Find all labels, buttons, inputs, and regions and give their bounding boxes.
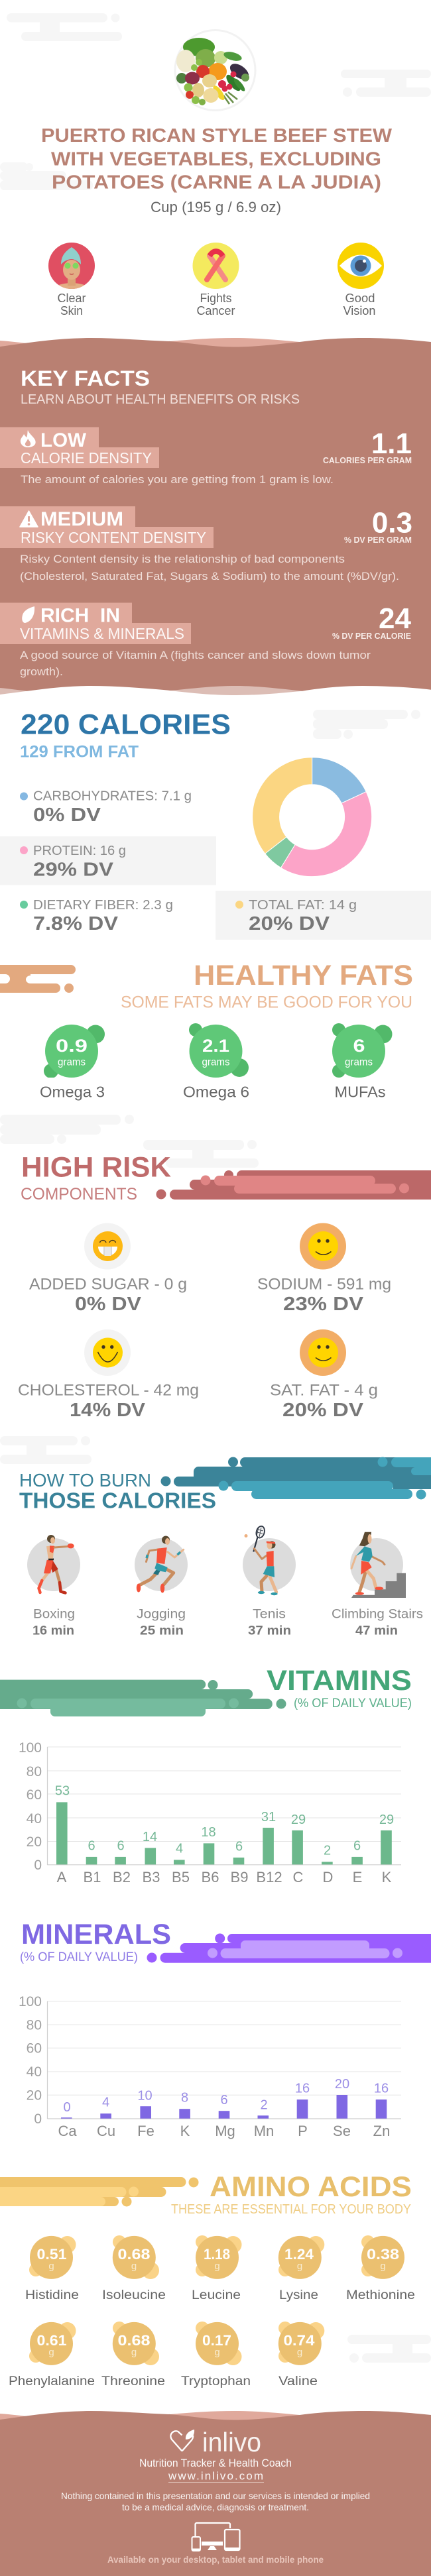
heading: how to burn those calories: THOSE CALORIES bbox=[19, 1488, 216, 1512]
subheading: vitamins: (% OF DAILY VALUE) bbox=[294, 1697, 412, 1710]
fact: medium risky content density: 0.3 bbox=[372, 506, 412, 539]
text: disclaimer: to be a medical advice, diagnosis or treatment. bbox=[122, 2502, 309, 2512]
decoration: amino acids bars bbox=[0, 2177, 199, 2207]
fat badge: omega 3: 0.9 bbox=[56, 1036, 88, 1056]
risk item: cholesterol: 14% DV bbox=[70, 1400, 146, 1421]
fact: rich in vitamins and minerals: RICH IN bbox=[40, 604, 120, 627]
bar chart: vitamins: B5 bbox=[172, 1869, 190, 1885]
bar chart: vitamins: 6 bbox=[117, 1839, 125, 1854]
background cloud: calories bbox=[313, 710, 420, 739]
exercise: climbing stairs bbox=[350, 1532, 406, 1598]
fat badge: omega 3: grams bbox=[58, 1056, 86, 1068]
text: disclaimer bbox=[61, 2491, 370, 2512]
bar chart: minerals: Fe bbox=[137, 2123, 154, 2139]
bar chart: minerals: K bbox=[180, 2123, 190, 2139]
title: PUERTO RICAN STYLE BEEF STEW bbox=[41, 125, 393, 146]
bar chart: vitamins: D bbox=[323, 1869, 333, 1885]
amino acid: threonine bbox=[101, 2322, 165, 2388]
amino acid: valine: Valine bbox=[278, 2375, 318, 2388]
background cloud: high risk left bbox=[0, 1115, 134, 1144]
bar chart: vitamins: 2 bbox=[324, 1844, 331, 1858]
text: tagline: Nutrition Tracker & Health Coach bbox=[139, 2457, 292, 2469]
bar chart: minerals: 4 bbox=[102, 2095, 109, 2109]
title bbox=[41, 125, 393, 194]
risk item: cholesterol bbox=[18, 1329, 199, 1421]
amino acid: methionine bbox=[346, 2235, 415, 2302]
exercise: tennis bbox=[243, 1525, 296, 1595]
fact: low calorie density: CALORIES PER GRAM bbox=[323, 455, 412, 465]
bar chart: vitamins: 80 bbox=[27, 1764, 42, 1779]
label: boxing: Boxing bbox=[33, 1608, 75, 1621]
fact: low calorie density bbox=[0, 427, 412, 486]
macro: protein: PROTEIN: 16 g bbox=[33, 844, 126, 858]
macro: total fat bbox=[216, 891, 431, 940]
text: website: www.inlivo.com bbox=[168, 2469, 263, 2483]
amino acid: leucine: 1.18 bbox=[204, 2246, 230, 2263]
serving size: Cup (195 g / 6.9 oz) bbox=[151, 199, 281, 215]
label: clear skin: Skin bbox=[60, 304, 83, 317]
amino acid: isoleucine bbox=[102, 2235, 166, 2302]
bar chart: minerals: 16 bbox=[295, 2082, 310, 2096]
amino acid: threonine: Threonine bbox=[101, 2375, 165, 2388]
bar chart: vitamins: E bbox=[353, 1869, 362, 1885]
bar chart: vitamins: C bbox=[293, 1869, 304, 1885]
fact: low calorie density: 1.1 bbox=[371, 427, 412, 460]
heading: how to burn those calories: HOW TO BURN bbox=[19, 1470, 151, 1490]
label: jogging: Jogging bbox=[137, 1608, 186, 1621]
fat badge: omega 3 bbox=[40, 1025, 105, 1100]
fact: rich in vitamins and minerals: 24 bbox=[379, 602, 412, 635]
amino acid: threonine: g bbox=[131, 2347, 137, 2358]
label: fights cancer: Cancer bbox=[196, 304, 235, 317]
risk item: saturated fat: 20% DV bbox=[282, 1400, 364, 1421]
amino acid: phenylalanine bbox=[9, 2322, 95, 2388]
title: WITH VEGETABLES, EXCLUDING bbox=[51, 148, 381, 170]
fact: low calorie density: CALORIE DENSITY bbox=[21, 449, 152, 467]
amino acid: isoleucine: g bbox=[131, 2261, 137, 2272]
subheading: from fat: 129 FROM FAT bbox=[20, 742, 139, 761]
decoration: minerals bars bbox=[147, 1934, 431, 1963]
amino acid: valine bbox=[278, 2322, 324, 2388]
risk item: added sugar: 0% DV bbox=[75, 1294, 142, 1315]
bar chart: minerals: Zn bbox=[373, 2123, 390, 2139]
decoration: high risk bars bbox=[156, 1170, 431, 1200]
bar chart: vitamins: 18 bbox=[201, 1825, 216, 1840]
bar chart: vitamins: 0 bbox=[34, 1858, 42, 1873]
decoration: healthy fats bars bbox=[0, 965, 76, 993]
heading: calories: 220 CALORIES bbox=[21, 709, 231, 741]
fact: medium risky content density: RISKY CONTENT DENSITY bbox=[21, 529, 206, 546]
bar chart: vitamins: 53 bbox=[55, 1784, 70, 1799]
bar chart: vitamins: B12 bbox=[256, 1869, 282, 1885]
bar chart: minerals: 100 bbox=[19, 1994, 42, 2009]
bar chart: minerals: Cu bbox=[97, 2123, 115, 2139]
amino acid: tryptophan: 0.17 bbox=[202, 2332, 231, 2349]
amino acid: leucine: g bbox=[214, 2261, 220, 2272]
decoration: vitamins bars bbox=[0, 1680, 286, 1716]
icon: fights cancer bbox=[192, 243, 239, 289]
risk item: cholesterol: CHOLESTEROL - 42 mg bbox=[18, 1381, 199, 1400]
exercise: boxing bbox=[27, 1535, 80, 1593]
bar chart: vitamins: 20 bbox=[27, 1834, 42, 1850]
amino acid: valine: g bbox=[297, 2347, 302, 2358]
amino acid: threonine: 0.68 bbox=[118, 2332, 150, 2349]
bar chart: vitamins: 4 bbox=[176, 1842, 183, 1856]
macro: protein: 29% DV bbox=[33, 859, 114, 880]
amino acid: histidine: Histidine bbox=[25, 2288, 79, 2302]
macro: carbohydrates: 0% DV bbox=[33, 805, 101, 826]
icon: good vision bbox=[338, 243, 384, 289]
risk item: added sugar bbox=[29, 1223, 187, 1315]
macro: total fat: TOTAL FAT: 14 g bbox=[249, 898, 357, 913]
subheading: healthy fats: SOME FATS MAY BE GOOD FOR YOU bbox=[121, 993, 412, 1011]
risk item: sodium: 23% DV bbox=[283, 1294, 364, 1315]
bar chart: minerals: Mn bbox=[254, 2123, 274, 2139]
background cloud: burn bbox=[0, 1436, 92, 1464]
amino acid: lysine: 1.24 bbox=[284, 2246, 314, 2263]
amino acid: valine: 0.74 bbox=[284, 2332, 315, 2349]
bar chart: minerals: 60 bbox=[27, 2041, 42, 2056]
macro: total fat: 20% DV bbox=[249, 913, 330, 934]
heading: how to burn those calories bbox=[19, 1470, 216, 1512]
risk item: saturated fat bbox=[270, 1329, 378, 1421]
background cloud: title left bbox=[0, 162, 93, 190]
label: tenis bbox=[248, 1608, 291, 1638]
panel: key facts bbox=[0, 338, 431, 695]
bar chart: minerals: 16 bbox=[374, 2082, 389, 2096]
fact: rich in vitamins and minerals bbox=[0, 602, 412, 678]
bar chart: vitamins: B3 bbox=[143, 1869, 160, 1885]
bar chart: vitamins: 100 bbox=[19, 1740, 42, 1756]
bar chart: vitamins: 14 bbox=[143, 1830, 157, 1844]
bar chart: minerals: 40 bbox=[27, 2064, 42, 2080]
fat badge: omega 6: grams bbox=[202, 1056, 229, 1068]
macro: dietary fiber bbox=[20, 898, 173, 934]
fact: low calorie density: The amount of calories you are getting from 1 gram is low. bbox=[21, 473, 334, 486]
bar chart: minerals: 6 bbox=[220, 2093, 228, 2107]
subheading: minerals: (% OF DAILY VALUE) bbox=[20, 1950, 138, 1964]
bar chart: minerals: 2 bbox=[260, 2098, 268, 2112]
bar chart: vitamins: 6 bbox=[235, 1839, 243, 1854]
bar chart: vitamins: 40 bbox=[27, 1811, 42, 1826]
fat badge: omega 3: Omega 3 bbox=[40, 1083, 105, 1100]
panel: footer bbox=[0, 2411, 431, 2576]
bar chart: minerals: 80 bbox=[27, 2017, 42, 2033]
amino acid: phenylalanine: Phenylalanine bbox=[9, 2375, 95, 2388]
label: good vision bbox=[343, 292, 375, 317]
logo: inlivo: inlivo bbox=[202, 2427, 261, 2457]
title: POTATOES (CARNE A LA JUDIA) bbox=[52, 172, 381, 194]
amino acid: methionine: 0.38 bbox=[367, 2246, 399, 2263]
bar chart: vitamins: 29 bbox=[379, 1813, 394, 1827]
bar chart: vitamins: A bbox=[57, 1869, 67, 1885]
amino acid: isoleucine: Isoleucine bbox=[102, 2288, 166, 2302]
heading: healthy fats: HEALTHY FATS bbox=[194, 960, 413, 991]
fat badge: MUFAs: MUFAs bbox=[334, 1083, 386, 1100]
icon: clear skin bbox=[48, 243, 95, 289]
exercise: jogging bbox=[135, 1536, 188, 1593]
bar chart: vitamins: 29 bbox=[291, 1813, 306, 1827]
macro: protein bbox=[0, 836, 216, 885]
bar chart: vitamins: 60 bbox=[27, 1787, 42, 1803]
bar chart: vitamins bbox=[19, 1740, 401, 1885]
bar chart: minerals: Mg bbox=[215, 2123, 235, 2139]
bar chart: vitamins: B2 bbox=[113, 1869, 131, 1885]
icon: devices bbox=[192, 2523, 240, 2551]
amino acid: leucine bbox=[192, 2235, 241, 2302]
subheading: amino acids: THESE ARE ESSENTIAL FOR YOUR BODY bbox=[171, 2202, 411, 2217]
fact: medium risky content density bbox=[0, 506, 412, 583]
fact: medium risky content density: Risky Content density is the relationship of bad components bbox=[20, 553, 345, 565]
fat badge: MUFAs: grams bbox=[345, 1056, 373, 1068]
fact: rich in vitamins and minerals: % DV PER CALORIE bbox=[332, 631, 411, 641]
fat badge: omega 6 bbox=[183, 1023, 249, 1100]
amino acid: phenylalanine: 0.61 bbox=[37, 2332, 66, 2349]
amino acid: lysine: g bbox=[297, 2261, 302, 2272]
bar chart: minerals: 0 bbox=[63, 2100, 71, 2115]
label: jogging: 25 min bbox=[140, 1624, 184, 1638]
bar chart: vitamins: 6 bbox=[353, 1839, 361, 1854]
macro: carbohydrates bbox=[20, 789, 192, 826]
label: tenis: Tenis bbox=[253, 1608, 286, 1621]
bar chart: minerals: 0 bbox=[34, 2111, 42, 2127]
amino acid: isoleucine: 0.68 bbox=[118, 2246, 150, 2263]
macro: dietary fiber: 7.8% DV bbox=[33, 913, 119, 934]
label: climbing stairs: Climbing Stairs bbox=[332, 1608, 423, 1621]
bar chart: vitamins: B9 bbox=[231, 1869, 248, 1885]
decoration: burn bars bbox=[160, 1457, 431, 1499]
bar chart: minerals: Ca bbox=[58, 2123, 77, 2139]
logo: inlivo bbox=[170, 2427, 261, 2457]
label: good vision: Good bbox=[345, 292, 375, 305]
text: disclaimer: Nothing contained in this presentation and our services is intended or implied bbox=[61, 2491, 370, 2501]
fat badge: omega 6: 2.1 bbox=[202, 1036, 229, 1056]
subheading: key facts: LEARN ABOUT HEALTH BENEFITS OR RISKS bbox=[21, 392, 300, 407]
amino acid: methionine: Methionine bbox=[346, 2288, 415, 2302]
label: clear skin bbox=[57, 292, 86, 317]
bar chart: minerals: 20 bbox=[335, 2077, 349, 2092]
amino acid: methionine: g bbox=[380, 2261, 386, 2272]
amino acid: histidine bbox=[25, 2236, 79, 2302]
bar chart: vitamins: 31 bbox=[261, 1810, 276, 1824]
label: tenis: 37 min bbox=[248, 1624, 291, 1638]
fact: low calorie density: LOW bbox=[40, 429, 87, 451]
risk item: sodium bbox=[257, 1223, 391, 1315]
amino acid: phenylalanine: g bbox=[48, 2347, 54, 2358]
text: availability: Available on your desktop, tablet and mobile phone bbox=[107, 2554, 324, 2565]
fact: medium risky content density: % DV PER GRAM bbox=[344, 535, 412, 545]
amino acid: histidine: g bbox=[48, 2261, 54, 2272]
macro: dietary fiber: DIETARY FIBER: 2.3 g bbox=[33, 898, 173, 913]
fat badge: MUFAs bbox=[332, 1023, 393, 1100]
food photo: vegetables bbox=[175, 30, 255, 110]
bar chart: minerals: Se bbox=[333, 2123, 351, 2139]
fact: medium risky content density: (Cholesterol, Saturated Fat, Sugars & Sodium) to the amount (%DV/gr). bbox=[20, 570, 399, 583]
label: clear skin: Clear bbox=[57, 292, 86, 305]
fact: medium risky content density: MEDIUM bbox=[40, 508, 123, 530]
amino acid: leucine: Leucine bbox=[192, 2288, 241, 2302]
amino acid: lysine bbox=[278, 2236, 324, 2302]
background cloud: high risk center bbox=[143, 1140, 259, 1168]
fact: rich in vitamins and minerals: growth). bbox=[20, 665, 63, 678]
amino acid: tryptophan: Tryptophan bbox=[181, 2375, 251, 2388]
risk item: added sugar: ADDED SUGAR - 0 g bbox=[29, 1275, 187, 1294]
background cloud: top right bbox=[341, 70, 431, 97]
heading: key facts: KEY FACTS bbox=[21, 366, 150, 390]
label: fights cancer bbox=[196, 292, 235, 317]
label: climbing stairs bbox=[332, 1608, 423, 1638]
amino acid: tryptophan: g bbox=[214, 2347, 220, 2358]
label: jogging bbox=[137, 1608, 186, 1638]
bar chart: minerals bbox=[19, 1994, 401, 2139]
macro: carbohydrates: CARBOHYDRATES: 7.1 g bbox=[33, 789, 192, 803]
fact: rich in vitamins and minerals: VITAMINS & MINERALS bbox=[20, 625, 184, 642]
amino acid: tryptophan bbox=[181, 2322, 251, 2388]
risk item: saturated fat: SAT. FAT - 4 g bbox=[270, 1381, 378, 1400]
label: good vision: Vision bbox=[343, 304, 375, 317]
risk item: sodium: SODIUM - 591 mg bbox=[257, 1275, 391, 1294]
fat badge: MUFAs: 6 bbox=[353, 1036, 365, 1056]
label: fights cancer: Fights bbox=[200, 292, 232, 305]
label: boxing: 16 min bbox=[32, 1624, 74, 1638]
bar chart: vitamins: B6 bbox=[202, 1869, 219, 1885]
bar chart: minerals: 20 bbox=[27, 2088, 42, 2103]
heading: amino acids: AMINO ACIDS bbox=[210, 2171, 412, 2203]
heading: high risk: HIGH RISK bbox=[21, 1152, 171, 1184]
fact: rich in vitamins and minerals: A good source of Vitamin A (fights cancer and slows down tumor bbox=[20, 649, 371, 661]
donut chart: macronutrients bbox=[253, 757, 372, 877]
background cloud: top left bbox=[7, 13, 122, 41]
bar chart: vitamins: B1 bbox=[84, 1869, 101, 1885]
bar chart: minerals: 8 bbox=[181, 2091, 188, 2105]
heading: minerals: MINERALS bbox=[21, 1919, 171, 1950]
heading: vitamins: VITAMINS bbox=[267, 1665, 412, 1697]
bar chart: vitamins: 6 bbox=[88, 1839, 95, 1854]
bar chart: vitamins: K bbox=[382, 1869, 392, 1885]
bar chart: minerals: 10 bbox=[137, 2088, 153, 2103]
fat badge: omega 6: Omega 6 bbox=[183, 1083, 249, 1100]
label: climbing stairs: 47 min bbox=[355, 1624, 398, 1638]
label: boxing bbox=[32, 1608, 75, 1638]
amino acid: histidine: 0.51 bbox=[37, 2246, 66, 2263]
background cloud: amino acids bbox=[347, 2335, 431, 2363]
subheading: components: COMPONENTS bbox=[21, 1185, 137, 1204]
bar chart: minerals: P bbox=[298, 2123, 308, 2139]
amino acid: lysine: Lysine bbox=[279, 2288, 318, 2302]
